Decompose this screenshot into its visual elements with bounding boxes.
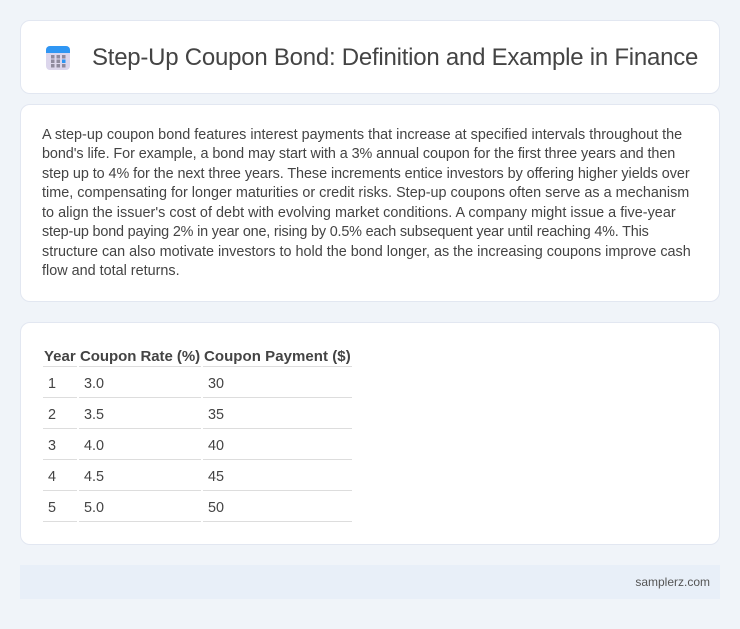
footer text: samplerz.com: [635, 575, 710, 589]
coupon table: 30: [208, 376, 224, 392]
coupon table: 3.0: [84, 376, 104, 392]
description text: [42, 127, 691, 279]
description text: time, compensating for longer maturities or credit risks. Step-up coupons often serve as a mechanism: [42, 185, 689, 201]
coupon table: 1: [48, 376, 56, 392]
panel: table: [20, 322, 720, 545]
coupon table: 3: [48, 438, 56, 454]
coupon table: 50: [208, 500, 224, 516]
coupon table: 4.0: [84, 438, 104, 454]
description text: bond's life. For example, a bond may start with a 3% annual coupon for the first three years and then: [42, 146, 675, 162]
description text: step-up bond paying 2% in year one, rising by 0.5% each subsequent year until reaching 4%. This: [42, 224, 649, 240]
coupon table: 40: [208, 438, 224, 454]
coupon table: 5.0: [84, 500, 104, 516]
description text: structure can also motivate investors to hold the bond longer, as the increasing coupons improve cash: [42, 244, 691, 260]
coupon table: Year: [44, 348, 76, 365]
coupon table: [43, 348, 352, 522]
description text: flow and total returns.: [42, 263, 180, 279]
description text: step up to 4% for the next three years. These increments entice investors by offering higher yields over: [42, 166, 690, 182]
coupon table: 35: [208, 407, 224, 423]
coupon table: 45: [208, 469, 224, 485]
coupon table: 3.5: [84, 407, 104, 423]
coupon table: 4.5: [84, 469, 104, 485]
coupon table: Coupon Rate (%): [80, 348, 200, 365]
title: Step-Up Coupon Bond: Definition and Example in Finance: [92, 44, 698, 71]
coupon table: 5: [48, 500, 56, 516]
description text: to align the issuer's cost of debt with evolving market conditions. A company might issue a five-year: [42, 205, 676, 221]
footer bar: [20, 565, 720, 599]
coupon table: 4: [48, 469, 56, 485]
icon: calendar: [46, 46, 70, 70]
coupon table: 2: [48, 407, 56, 423]
header panel: [20, 20, 720, 94]
coupon table: Coupon Payment ($): [204, 348, 351, 365]
panel: description: [20, 104, 720, 302]
description text: A step-up coupon bond features interest payments that increase at specified intervals throughout the: [42, 127, 682, 143]
